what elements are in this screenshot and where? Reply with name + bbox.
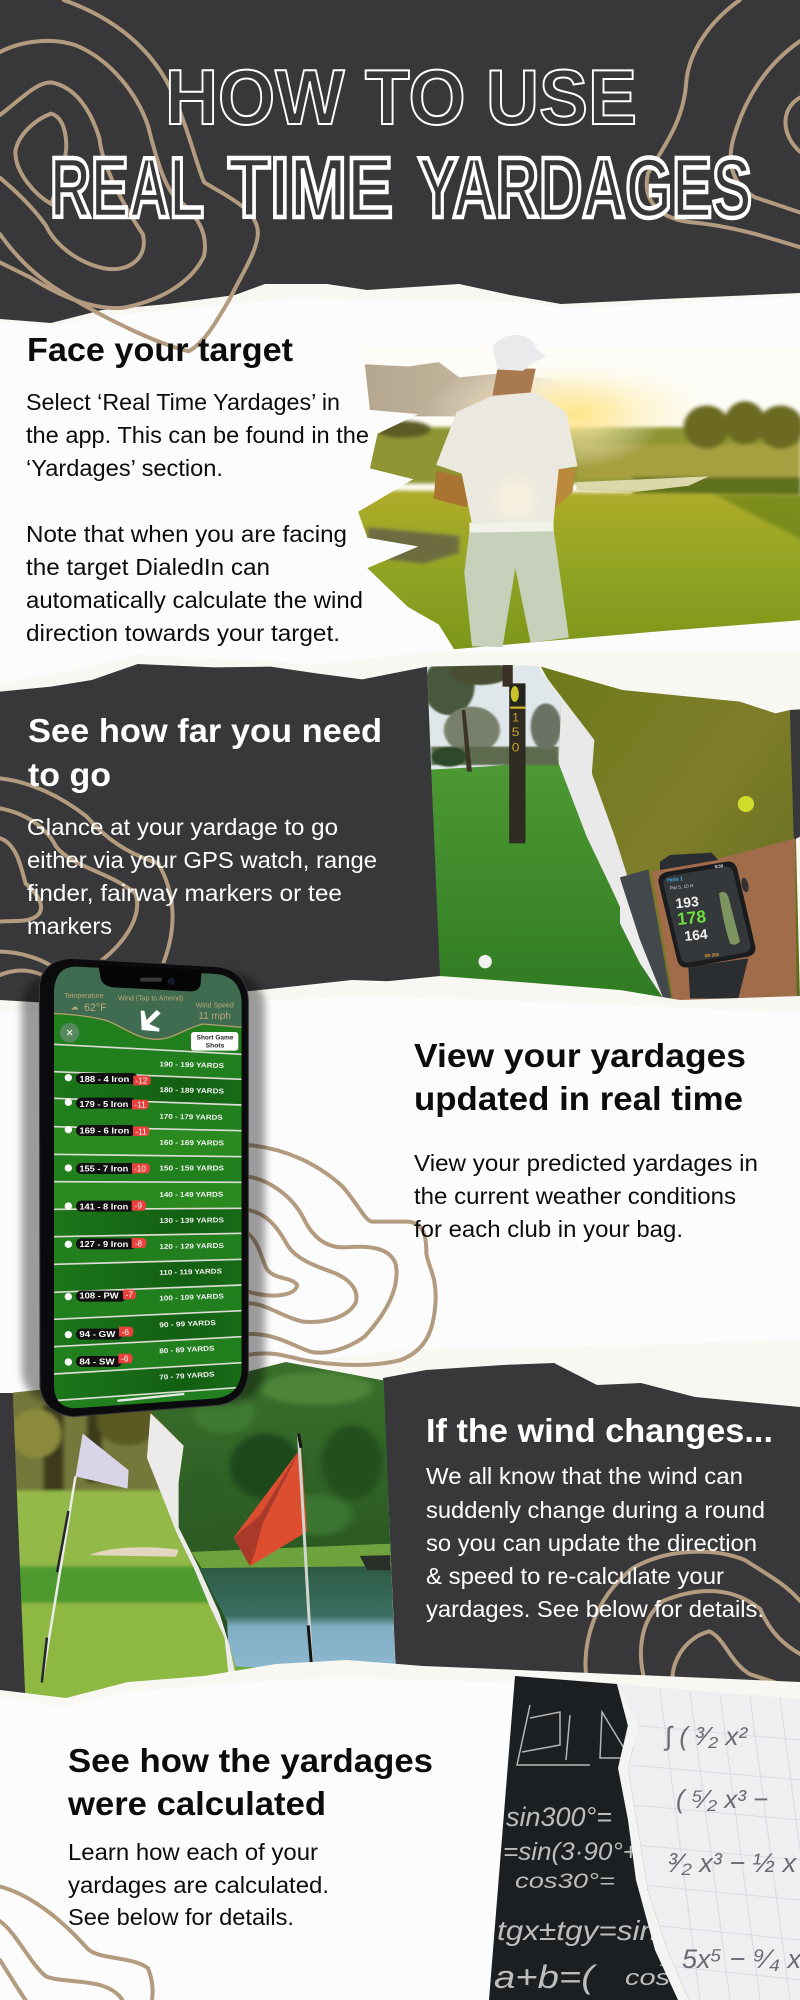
short game button: [191, 1032, 238, 1051]
heading: updated in real time: [414, 1080, 743, 1117]
section: how calculated text: [67, 1742, 433, 1930]
panel: see how far dark paper: [0, 652, 800, 1008]
photo: blackboard and graph paper maths: cos: [625, 1965, 670, 1990]
torn paper strip: [541, 670, 669, 1003]
yardage band labels: 190 - 199 YARDS: [159, 1061, 224, 1070]
short game button: Short Game: [197, 1034, 234, 1041]
body copy: See below for details.: [68, 1904, 294, 1930]
header band: [50, 963, 247, 1039]
photo: blackboard and graph paper maths: cos30°=: [515, 1870, 615, 1893]
photo: golf flags and lake: [12, 1362, 395, 1698]
body copy: yardages. See below for details.: [426, 1596, 764, 1622]
graph paper: [617, 1684, 800, 2000]
photo: blackboard and graph paper maths: ³⁄₂ x³ − ½ x: [668, 1848, 798, 1878]
phone body: [39, 958, 248, 1417]
heading: to go: [28, 756, 111, 793]
club rows: 141 - 8 Iron: [79, 1201, 128, 1211]
body copy: for each club in your bag.: [414, 1216, 683, 1242]
body copy: [426, 1463, 765, 1622]
heading: [28, 712, 382, 793]
strap: [660, 853, 748, 998]
club rows: 94 - GW: [79, 1329, 116, 1339]
photo: blackboard and graph paper maths: 5x⁵ − ⁹⁄₄ x: [682, 1944, 800, 1974]
club rows: -6: [122, 1327, 129, 1337]
topographic lines: centre: [248, 1145, 436, 1365]
scene: yardage post on grass: [427, 665, 662, 998]
body copy: Note that when you are facing: [26, 521, 347, 547]
body copy: [26, 389, 369, 646]
yardage band labels: 90 - 99 YARDS: [159, 1320, 216, 1329]
watch text: Hole 1: [667, 876, 683, 884]
photo: blackboard and graph paper maths: ∫ ( ³⁄₂ x²: [663, 1721, 748, 1751]
header labels: Wind Speed: [196, 1002, 234, 1009]
body copy: direction towards your target.: [26, 620, 340, 646]
short game button: Shots: [206, 1043, 225, 1050]
topographic lines: top right: [647, 0, 800, 247]
body copy: [68, 1839, 329, 1930]
header labels: Wind (Tap to Amend): [118, 996, 183, 1003]
body copy: either via your GPS watch, range: [27, 847, 377, 873]
turf bands: [50, 963, 247, 1413]
scene: yardage post on grass: 0: [512, 741, 520, 754]
body copy: [27, 814, 377, 939]
header labels: ☁: [71, 1002, 79, 1011]
club rows: 155 - 7 Iron: [79, 1164, 128, 1174]
topographic lines: bottom left: [0, 1887, 153, 2000]
heading: See how far you need: [28, 712, 382, 749]
wrist with GPS watch: [620, 838, 797, 1002]
watch text: SR 252: [704, 952, 720, 958]
close button: [60, 1023, 79, 1042]
heading: See how the yardages: [68, 1742, 433, 1779]
title: [50, 53, 752, 236]
scene: yardage post on grass: 1: [512, 711, 519, 724]
yard lines: [54, 1044, 242, 1401]
club rows: -11: [135, 1126, 147, 1136]
background: dark header: [0, 0, 800, 345]
yardage band labels: [159, 1061, 224, 1382]
title line: real time yardages: [50, 141, 752, 236]
heading: If the wind changes...: [426, 1412, 773, 1449]
yardage band labels: 110 - 119 YARDS: [159, 1268, 222, 1277]
header labels: 62°F: [84, 1002, 107, 1014]
topographic lines: second panel: [0, 778, 173, 977]
club rows: 179 - 5 Iron: [79, 1099, 128, 1109]
panel: calculated paper: [0, 1660, 800, 2000]
club rows: -7: [126, 1290, 133, 1300]
sleeve: [620, 869, 672, 1002]
yardage band labels: 150 - 159 YARDS: [159, 1166, 224, 1173]
section: see how far text: [27, 712, 382, 939]
section: updated yardages text: [414, 1037, 758, 1242]
panel: real-time yardages paper: [0, 976, 800, 1400]
watch text: [666, 863, 733, 961]
panel: wind changes dark paper and left strip: [0, 1353, 800, 1703]
yardage band labels: 170 - 179 YARDS: [159, 1114, 223, 1122]
body copy: ‘Yardages’ section.: [26, 455, 223, 481]
body copy: We all know that the wind can: [426, 1463, 743, 1489]
photo: blackboard and graph paper maths: tgx±tgy=sin: [497, 1915, 657, 1946]
section: face your target text: [26, 331, 369, 646]
right scene: forest and lake: [148, 1360, 403, 1687]
club rows: -8: [135, 1238, 142, 1248]
water: [577, 476, 709, 492]
fairway: [352, 490, 800, 659]
club rows: -12: [135, 1076, 148, 1086]
scene: blurred olive background: [541, 667, 800, 1003]
home indicator: [118, 1394, 183, 1401]
screen: [50, 963, 247, 1413]
body copy: markers: [27, 913, 112, 939]
yardage band labels: 180 - 189 YARDS: [159, 1087, 224, 1095]
photo: fairway marker and watch: [423, 658, 800, 1010]
hole map: [719, 892, 740, 945]
panel: face your target paper: [0, 284, 800, 700]
watch text: 193: [675, 893, 700, 911]
header labels: [64, 993, 234, 1022]
scene: yardage post on grass: 5: [512, 726, 519, 739]
yardage band labels: 120 - 129 YARDS: [159, 1243, 224, 1251]
red flag: [234, 1433, 312, 1674]
yardage band labels: 100 - 109 YARDS: [159, 1293, 224, 1303]
section: wind changes text: [426, 1412, 773, 1622]
watch text: Par 5, 10 H: [670, 883, 694, 891]
topographic lines: lower right: [586, 1552, 800, 1687]
body copy: finder, fairway markers or tee: [27, 880, 342, 906]
club rows: 188 - 4 Iron: [79, 1074, 129, 1084]
notch: [98, 965, 202, 991]
yardage band labels: 80 - 89 YARDS: [159, 1345, 215, 1355]
golfer: [434, 335, 578, 647]
watch text: 9:59: [714, 863, 724, 869]
club rows: 127 - 9 Iron: [79, 1239, 128, 1249]
body copy: Learn how each of your: [68, 1839, 318, 1865]
body copy: so you can update the direction: [426, 1530, 757, 1556]
topographic lines: top left: [0, 0, 258, 351]
body copy: [414, 1150, 758, 1242]
club rows: 169 - 6 Iron: [79, 1126, 129, 1136]
yardage band labels: 140 - 149 YARDS: [159, 1192, 224, 1199]
case: [658, 862, 755, 968]
header labels: Temperature: [64, 993, 104, 1000]
blackboard: [489, 1676, 700, 2000]
body copy: View your predicted yardages in: [414, 1150, 758, 1176]
club rows: -11: [134, 1100, 146, 1110]
body copy: Select ‘Real Time Yardages’ in: [26, 389, 340, 415]
yardage band labels: 70 - 79 YARDS: [159, 1371, 215, 1382]
dark edge strip: [790, 709, 800, 840]
club rows: [65, 1073, 151, 1367]
title line: how to use: HOW TO USE: [165, 53, 637, 141]
photo: blackboard and graph paper maths: a+b=(: [494, 1959, 598, 1995]
body copy: yardages are calculated.: [68, 1872, 329, 1898]
body copy: suddenly change during a round: [426, 1497, 765, 1523]
body copy: Glance at your yardage to go: [27, 814, 338, 840]
photo: blackboard and graph paper maths: sin300°=: [506, 1802, 612, 1832]
phone mockup: [22, 958, 265, 1417]
close button: ✕: [66, 1028, 73, 1038]
body copy: & speed to re-calculate your: [426, 1563, 724, 1589]
photo: blackboard and graph paper maths: =sin(3·90°+: [503, 1838, 638, 1866]
heading: Face your target: [27, 331, 293, 368]
arm: [652, 838, 797, 1002]
yardage band labels: 160 - 169 YARDS: [159, 1140, 224, 1147]
heading: View your yardages: [414, 1037, 746, 1074]
header labels: 11 mph: [198, 1011, 231, 1022]
watch text: 164: [683, 926, 709, 944]
watch text: 178: [676, 906, 707, 929]
hills: [364, 362, 558, 416]
title line: real time yardages: TIME: [228, 141, 393, 236]
far course: [357, 401, 800, 497]
heading: were calculated: [67, 1785, 326, 1822]
photo: golfer on fairway: [352, 335, 800, 659]
tear shadow strip: [617, 1684, 689, 2000]
heading: [67, 1742, 433, 1822]
photo: blackboard and graph paper maths: ( ⁵⁄₂ x³ −: [676, 1784, 768, 1814]
torn paper strip: [147, 1413, 237, 1685]
body copy: the current weather conditions: [414, 1183, 736, 1209]
club rows: 108 - PW: [79, 1291, 120, 1301]
body copy: the app. This can be found in the: [26, 422, 369, 448]
tennis-yellow ball: [738, 796, 754, 812]
club rows: -10: [134, 1164, 146, 1174]
title line: real time yardages: REAL: [50, 141, 204, 236]
drop shadow: [22, 973, 265, 1403]
club rows: -9: [135, 1201, 142, 1211]
body copy: the target DialedIn can: [26, 554, 270, 580]
yardage band labels: 130 - 139 YARDS: [159, 1217, 224, 1225]
club rows: -6: [121, 1354, 129, 1364]
photo: blackboard and graph paper maths: [489, 1676, 800, 2000]
club rows: 84 - SW: [79, 1356, 116, 1366]
left scene: fairway and white flag: [12, 1390, 236, 1698]
body copy: automatically calculate the wind: [26, 587, 363, 613]
heading: [414, 1037, 746, 1117]
wind arrow: [141, 1010, 161, 1032]
